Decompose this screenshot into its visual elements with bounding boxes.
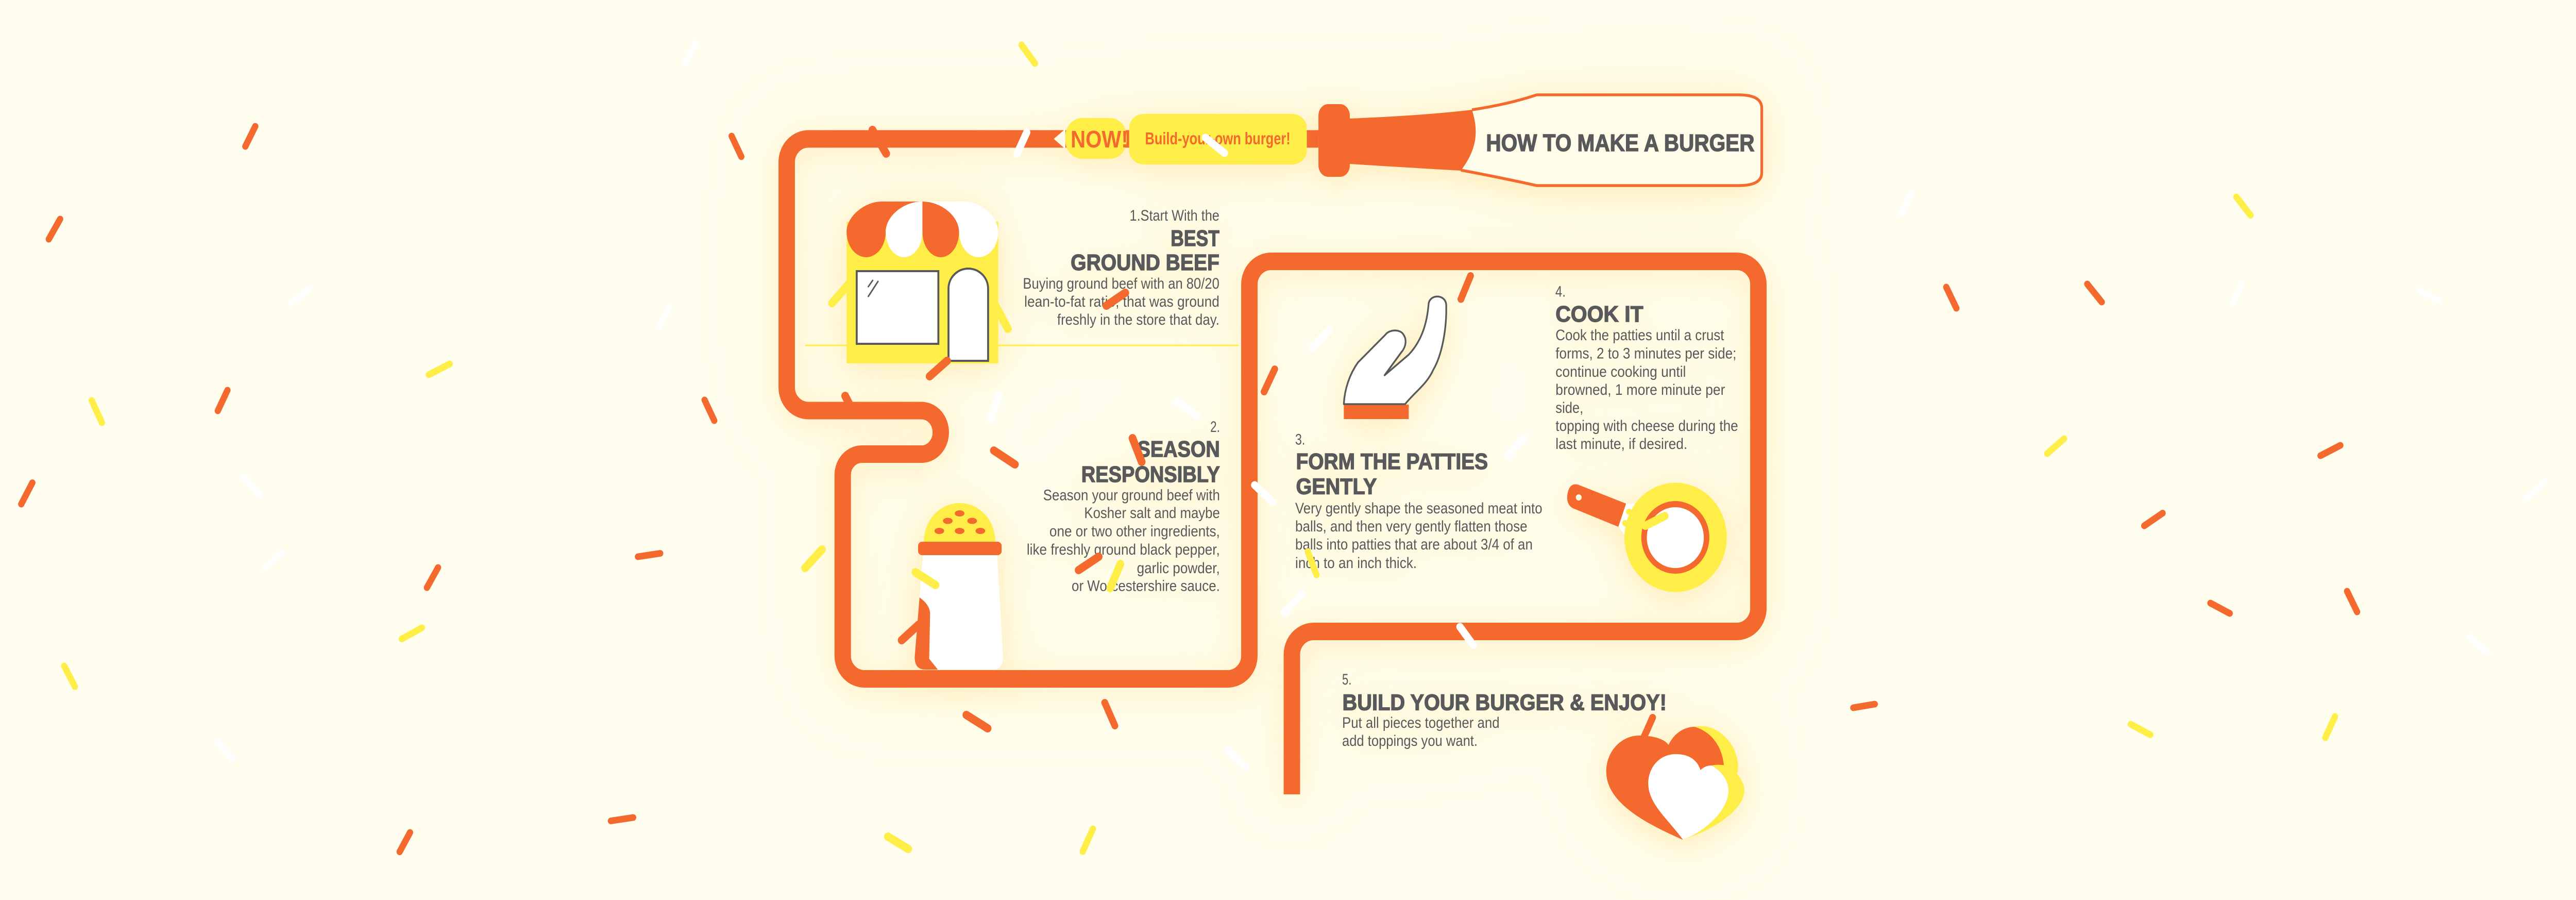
step 4 text: last minute, if desired. [1555,436,1687,453]
badge: build your own burger [1129,114,1307,164]
step 2 text: like freshly ground black pepper, [1027,541,1220,558]
sprinkles: orange [21,126,2357,852]
step 2 text: RESPONSIBLY [1081,462,1220,487]
step 3 text: inch to an inch thick. [1295,555,1417,572]
step 1 text: BEST [1171,226,1219,251]
step 3 text: balls, and then very gently flatten those [1295,518,1528,535]
step 2 text: Season your ground beef with [1043,487,1220,504]
step 1 text: lean-to-fat ratio, that was ground [1024,293,1219,310]
step 3 text [1295,431,1543,572]
step 4 text: continue cooking until [1555,363,1686,380]
icon: salt shaker [914,503,1003,670]
step 5 text: BUILD YOUR BURGER & ENJOY! [1343,690,1667,715]
step 2 text: one or two other ingredients, [1049,523,1220,540]
step 2 text [1027,419,1220,595]
step 3 text: FORM THE PATTIES [1296,449,1488,474]
step 5 text: 5. [1342,671,1351,688]
step 2 text: Kosher salt and maybe [1084,505,1220,522]
sprinkles: white [217,43,2544,766]
step 4 text: browned, 1 more minute per [1555,381,1725,398]
icon: store [846,202,998,363]
step 4 text: Cook the patties until a crust [1555,327,1724,344]
badge: build your own burger: Build-your-own burger! [1145,129,1291,148]
step 3 text: Very gently shape the seasoned meat into [1295,500,1543,517]
step 4 text: forms, 2 to 3 minutes per side; [1555,345,1736,362]
icon: heart burger [1606,726,1744,840]
step 4 text: 4. [1555,284,1566,301]
arrow notch [1054,129,1065,149]
step 5 text: Put all pieces together and [1342,714,1500,731]
icon: hand [1344,296,1446,419]
step 1 text: GROUND BEEF [1071,250,1219,275]
step 3 text: 3. [1295,431,1305,448]
step 1 text: Buying ground beef with an 80/20 [1023,275,1219,292]
sprinkles: yellow [64,45,2335,852]
step 4 text: side, [1555,399,1583,416]
step 2 text: 2. [1210,419,1220,436]
badge: now [1065,118,1128,159]
step 1 text [1023,207,1219,328]
step 3 text: balls into patties that are about 3/4 of an [1295,536,1533,553]
step 1 text: 1.Start With the [1130,207,1219,224]
title: HOW TO MAKE A BURGER [1486,130,1755,156]
step 4 text [1555,284,1738,453]
step 3 text: GENTLY [1296,474,1377,499]
step 1 text: freshly in the store that day. [1057,311,1219,328]
main content [787,95,1762,840]
icon: sauce bottle [1318,95,1762,186]
step 5 text [1342,671,1667,749]
divider line [805,344,1239,346]
step 2 text: garlic powder, [1137,560,1220,577]
step 2 text: SEASON [1138,437,1220,462]
step 2 text: or Worcestershire sauce. [1072,578,1220,595]
icon: frying pan [1567,482,1727,592]
step 4 text: topping with cheese during the [1555,418,1738,435]
badge: now: NOW! [1071,127,1128,153]
winding sauce path [787,139,1758,794]
step 5 text: add toppings you want. [1342,732,1478,749]
step 4 text: COOK IT [1555,302,1643,327]
